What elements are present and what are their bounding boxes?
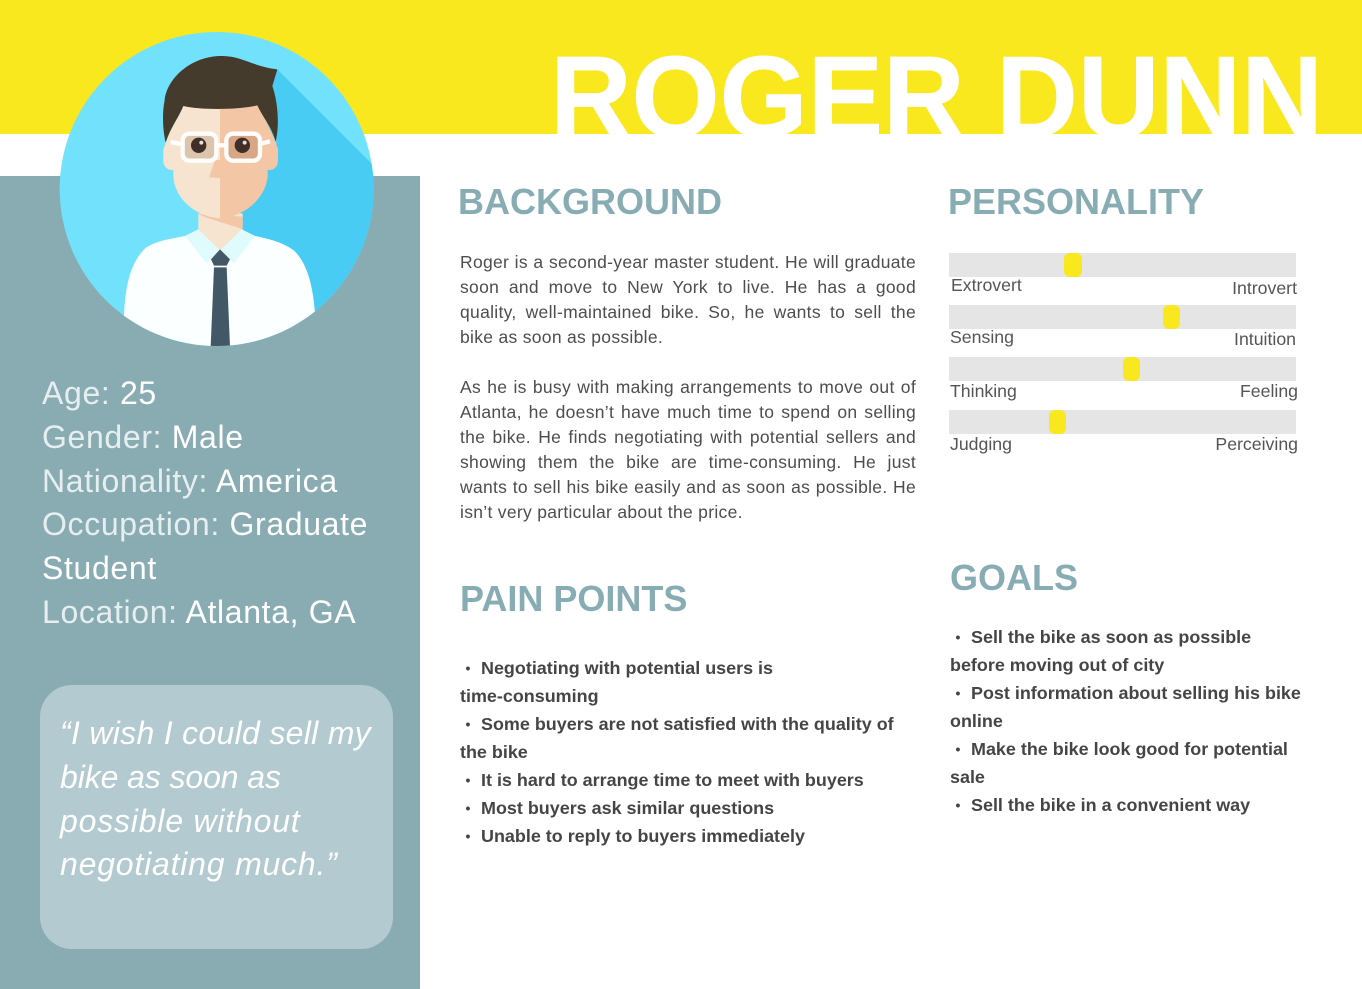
goals list: •	[956, 797, 960, 813]
background text: Atlanta, he doesn’t have much time to spend on selling	[460, 402, 916, 422]
profile details: Student	[42, 550, 157, 586]
quote text: bike as soon as	[60, 759, 281, 795]
quote text: “I wish I could sell my	[60, 715, 371, 751]
heading: goals: GOALS	[950, 557, 1078, 598]
personality sliders: Feeling	[1240, 381, 1298, 401]
yellow header band	[0, 0, 1362, 134]
personality sliders: Thinking	[950, 381, 1017, 401]
title: ROGER DUNN	[550, 32, 1323, 162]
pain points list: It is hard to arrange time to meet with buyers	[481, 770, 864, 790]
background text: soon and move to New York to live. He has a good	[460, 277, 916, 297]
pain points list: time-consuming	[460, 686, 599, 706]
pain points list	[460, 658, 894, 846]
background text: Roger is a second-year master student. He will graduate	[460, 252, 916, 272]
pain points list: •	[466, 772, 470, 788]
background text: showing them the bike are time-consuming. He just	[460, 452, 916, 472]
goals list: Sell the bike in a convenient way	[971, 795, 1250, 815]
goals list: online	[950, 711, 1003, 731]
goals list: •	[956, 629, 960, 645]
background text: As he is busy with making arrangements to move out of	[460, 377, 916, 397]
goals list: Sell the bike as soon as possible	[971, 627, 1251, 647]
icon: avatar portrait	[60, 32, 374, 346]
personality sliders	[949, 253, 1298, 454]
profile details: Age: 25	[42, 375, 157, 411]
pain points list: Most buyers ask similar questions	[481, 798, 774, 818]
pain points list: •	[466, 828, 470, 844]
goals list: •	[956, 741, 960, 757]
pain points list: •	[466, 716, 470, 732]
quote card	[40, 685, 393, 949]
personality sliders: Perceiving	[1215, 434, 1298, 454]
quote text	[59, 715, 372, 882]
profile details: Occupation: Graduate	[42, 506, 368, 542]
personality sliders: Introvert	[1232, 278, 1297, 298]
goals list: Post information about selling his bike	[971, 683, 1301, 703]
heading: pain points: PAIN POINTS	[460, 578, 687, 619]
background text: wants to sell his bike easily and as soon as possible. He	[460, 477, 916, 497]
goals list: •	[956, 685, 960, 701]
background text	[460, 252, 916, 522]
pain points list: the bike	[460, 742, 528, 762]
quote text: negotiating much.”	[60, 846, 338, 882]
goals list	[950, 627, 1301, 815]
quote text: possible without	[60, 803, 300, 839]
background text: the bike. He finds negotiating with potential sellers and	[460, 427, 916, 447]
personality sliders: Judging	[950, 434, 1012, 454]
profile details	[42, 375, 368, 630]
pain points list: Unable to reply to buyers immediately	[481, 826, 805, 846]
personality sliders: Intuition	[1234, 329, 1296, 349]
personality sliders: Extrovert	[951, 275, 1022, 295]
goals list: before moving out of city	[950, 655, 1164, 675]
goals list: sale	[950, 767, 985, 787]
heading: personality: PERSONALITY	[948, 181, 1204, 222]
pain points list: Negotiating with potential users is	[481, 658, 773, 678]
pain points list: •	[466, 660, 470, 676]
profile details: Nationality: America	[42, 463, 338, 499]
pain points list: Some buyers are not satisfied with the quality of	[481, 714, 894, 734]
profile details: Gender: Male	[42, 419, 244, 455]
heading: background: BACKGROUND	[458, 181, 722, 222]
background text: quality, well-maintained bike. So, he wants to sell the	[460, 302, 916, 322]
personality sliders: Sensing	[950, 327, 1014, 347]
pain points list: •	[466, 800, 470, 816]
panel: profile sidebar	[0, 176, 420, 989]
background text: bike as soon as possible.	[460, 327, 663, 347]
goals list: Make the bike look good for potential	[971, 739, 1288, 759]
profile details: Location: Atlanta, GA	[42, 594, 356, 630]
background text: isn’t very particular about the price.	[460, 502, 743, 522]
